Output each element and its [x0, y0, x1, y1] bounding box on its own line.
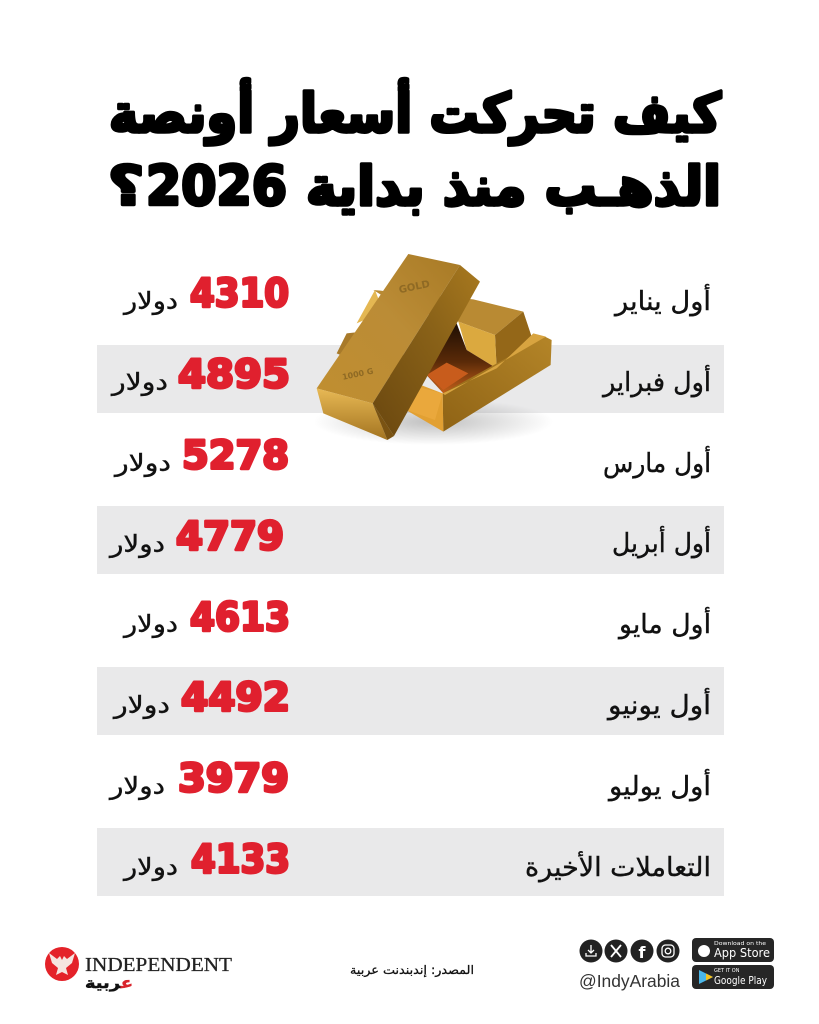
badge: App Store: Download on the	[714, 941, 767, 947]
row: latest trading: دولار	[123, 853, 178, 881]
bar engravings: GOLD	[398, 279, 431, 296]
eagle	[49, 953, 75, 975]
badge: Google Play	[692, 965, 774, 989]
badge: App Store	[692, 938, 774, 962]
row: June: 4492	[181, 676, 290, 720]
row: January: دولار	[123, 287, 178, 315]
row: April: أول أبريل	[612, 525, 711, 559]
title	[108, 78, 722, 218]
row: May: أول مايو	[617, 606, 711, 640]
row: latest trading	[123, 838, 711, 883]
social icons	[580, 940, 680, 962]
source: المصدر: إندبندنت عربية	[350, 963, 474, 978]
logo: Independent Arabia: عربية	[85, 974, 133, 992]
row: January: 4310	[190, 272, 289, 316]
row: February: أول فبراير	[601, 364, 711, 398]
title: كيف تحركت أسعار أونصة	[109, 78, 722, 145]
row: latest trading: 4133	[191, 838, 290, 882]
row: March	[114, 434, 711, 479]
row: April: دولار	[109, 530, 165, 558]
row: July: 3979	[178, 756, 289, 802]
back bar	[357, 290, 532, 368]
row: July	[109, 756, 711, 802]
row: latest trading: التعاملات الأخيرة	[525, 850, 711, 883]
logo: Independent Arabia	[45, 947, 232, 992]
badge: Google Play: Google Play	[714, 974, 767, 987]
bar engravings	[341, 279, 431, 382]
social icons: f	[639, 943, 647, 962]
row: March: دولار	[114, 449, 171, 477]
row: April	[109, 514, 711, 560]
lower bar	[337, 323, 552, 432]
red circle emblem	[45, 947, 79, 981]
title: الذهـب منذ بداية	[306, 155, 721, 218]
row: March: 5278	[182, 434, 289, 478]
row: February: 4895	[178, 352, 290, 398]
row stripes	[97, 345, 724, 896]
logo: Independent Arabia: INDEPENDENT	[85, 954, 232, 976]
title: 2026	[146, 154, 287, 218]
title: ؟	[108, 154, 144, 218]
row: May	[123, 596, 711, 640]
row: January: أول يناير	[613, 283, 711, 317]
row: February: دولار	[111, 368, 168, 396]
row: May: دولار	[123, 610, 178, 638]
badge: Google Play: GET IT ON	[714, 968, 740, 974]
icon: gold bars	[313, 254, 553, 445]
main bar	[317, 254, 480, 440]
row: April: 4779	[176, 514, 284, 560]
row: June: دولار	[113, 691, 170, 719]
row: January	[123, 272, 711, 317]
bar engravings: 1000 G	[341, 367, 374, 382]
row: May: 4613	[190, 596, 290, 640]
row: June	[113, 676, 711, 721]
row: February	[111, 352, 711, 398]
handle: @IndyArabia	[579, 971, 680, 991]
row: June: أول يونيو	[606, 687, 711, 721]
badge: App Store: App Store	[714, 946, 770, 960]
row: March: أول مارس	[603, 445, 711, 479]
row: July: أول يوليو	[607, 768, 711, 802]
row: July: دولار	[109, 772, 165, 800]
